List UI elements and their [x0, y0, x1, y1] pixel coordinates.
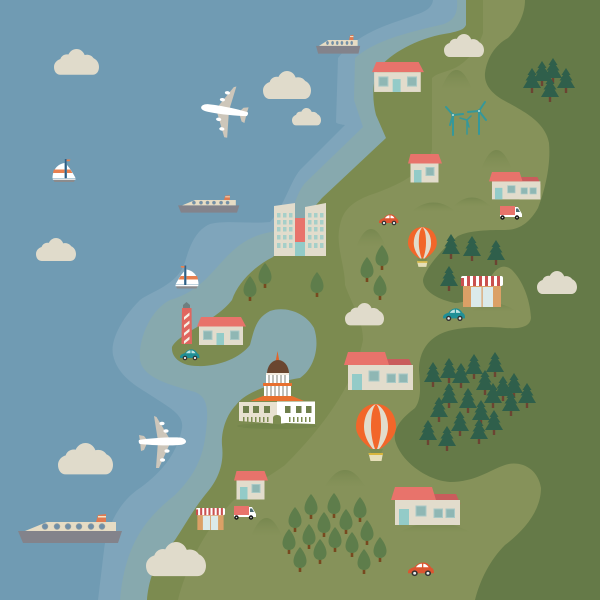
teal car: lighthouse — [180, 349, 200, 360]
house: north coast — [372, 62, 424, 92]
cloud — [263, 71, 311, 99]
shop: east — [461, 276, 503, 307]
leafy trees: west — [244, 263, 324, 301]
red car: south — [408, 562, 434, 576]
sailboat: upper — [52, 159, 76, 182]
hot air balloon: small — [408, 227, 437, 267]
airplane: upper — [197, 82, 252, 140]
sailboat: lower — [176, 266, 198, 288]
cruise ship: large — [18, 514, 122, 543]
house with annex: east — [489, 172, 541, 199]
red car — [379, 214, 398, 225]
capitol building — [237, 351, 317, 429]
lighthouse — [182, 302, 192, 344]
cloud — [58, 443, 113, 474]
cloud — [537, 271, 577, 294]
house: small center — [408, 154, 442, 182]
cruise ship: top — [316, 35, 360, 54]
house: small south — [234, 471, 268, 500]
house with annex: center — [344, 352, 414, 390]
pine cluster: northeast — [523, 58, 575, 102]
pine forest: southeast — [419, 352, 536, 451]
delivery truck: south — [234, 506, 256, 520]
pine cluster: middle — [440, 234, 505, 291]
cloud — [444, 34, 484, 57]
cloud — [345, 303, 384, 325]
lighter inland terrain — [178, 0, 600, 600]
cloud — [54, 49, 99, 75]
cruise ship: middle — [178, 195, 239, 213]
land — [147, 0, 600, 600]
cloud — [292, 108, 321, 125]
leafy tree grove: south — [282, 493, 386, 574]
dark green uplands — [395, 0, 600, 600]
hills — [230, 70, 518, 537]
teal car: east — [443, 308, 465, 321]
office towers — [274, 203, 326, 256]
wind turbines — [446, 102, 486, 135]
house with annex: south — [391, 487, 460, 525]
delivery truck: east — [500, 206, 522, 220]
hot air balloon: large — [356, 404, 396, 461]
coastal green-tinted water band — [120, 0, 600, 600]
leafy trees: center — [360, 245, 388, 300]
house: by lighthouse — [197, 317, 246, 345]
shop: south — [196, 508, 225, 530]
cloud — [36, 238, 76, 261]
airplane: lower — [139, 416, 186, 468]
cloud — [146, 542, 206, 576]
